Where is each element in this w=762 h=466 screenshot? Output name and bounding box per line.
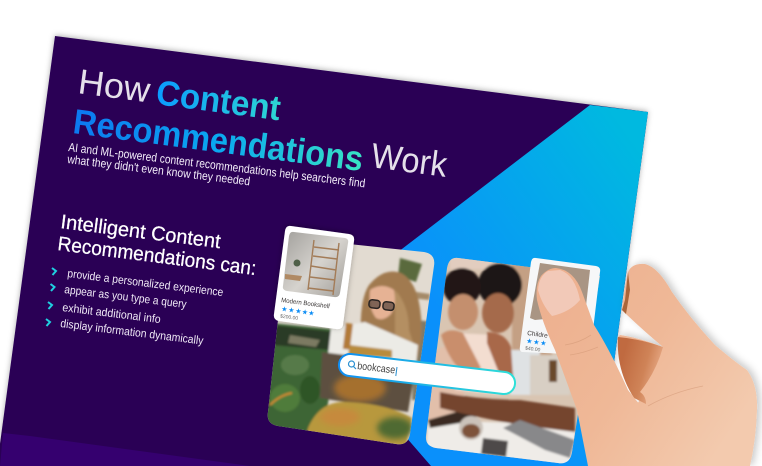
knuckle creases bbox=[565, 335, 703, 406]
product card: modern bookshelf: Modern Bookshelf bbox=[281, 297, 330, 310]
search bar: bookcase bbox=[357, 360, 396, 376]
middle finger fold bbox=[618, 337, 663, 404]
blue diagonal background bbox=[398, 105, 648, 466]
search bar bbox=[339, 354, 515, 394]
star rating: ★ bbox=[533, 338, 540, 347]
photo: mother and child at laptop bbox=[426, 258, 600, 464]
section heading: Intelligent Content bbox=[59, 211, 222, 253]
star rating: ★ bbox=[526, 337, 533, 346]
title bbox=[71, 62, 450, 185]
thumbnail bbox=[538, 270, 580, 316]
bullet: additional info: exhibit additional info bbox=[62, 302, 161, 326]
bullet: type a query: appear as you type a query bbox=[64, 284, 187, 311]
thumb bbox=[536, 268, 690, 466]
subtitle: AI and ML-powered content recommendations help searchers find bbox=[68, 140, 366, 190]
section heading bbox=[56, 211, 258, 280]
product card: modern bookshelf bbox=[274, 226, 354, 329]
product card: children's item: $40.00 bbox=[525, 346, 541, 354]
title: Work bbox=[369, 136, 450, 185]
product card: children's item bbox=[520, 258, 600, 355]
section heading: Recommendations can: bbox=[56, 233, 258, 280]
product card: children's item: Childre bbox=[527, 330, 548, 340]
card image bbox=[283, 232, 348, 297]
star rating: ★ bbox=[288, 306, 295, 315]
star rating: ★ bbox=[308, 309, 315, 318]
card image bbox=[530, 263, 590, 320]
title: Recommendations bbox=[71, 102, 366, 179]
star rating: ★ bbox=[540, 339, 547, 348]
product card: modern bookshelf: $200.00 bbox=[280, 314, 299, 322]
title: Content bbox=[154, 73, 283, 128]
title: How bbox=[76, 62, 153, 110]
hand holding the sheet bbox=[536, 264, 757, 466]
index finger shadow bbox=[622, 272, 630, 314]
subtitle: what they didn't even know they needed bbox=[66, 152, 251, 188]
star rating: ★ bbox=[301, 308, 309, 317]
bottom purple band bbox=[0, 433, 250, 466]
magnifier icon bbox=[348, 361, 356, 369]
photo: woman with laptop bbox=[268, 244, 434, 444]
star rating: ★ bbox=[295, 307, 302, 316]
hand silhouette: index finger and palm bbox=[590, 264, 757, 466]
panel: tilted infographic sheet bbox=[0, 36, 648, 466]
woman's glasses bbox=[369, 299, 394, 311]
star rating bbox=[281, 305, 315, 318]
bullet list bbox=[46, 268, 224, 348]
bullet: dynamic information: display information dynamically bbox=[60, 318, 204, 348]
star rating bbox=[526, 337, 547, 348]
star rating: ★ bbox=[281, 305, 288, 314]
bullet: personalized experience: provide a personalized experience bbox=[67, 268, 224, 299]
